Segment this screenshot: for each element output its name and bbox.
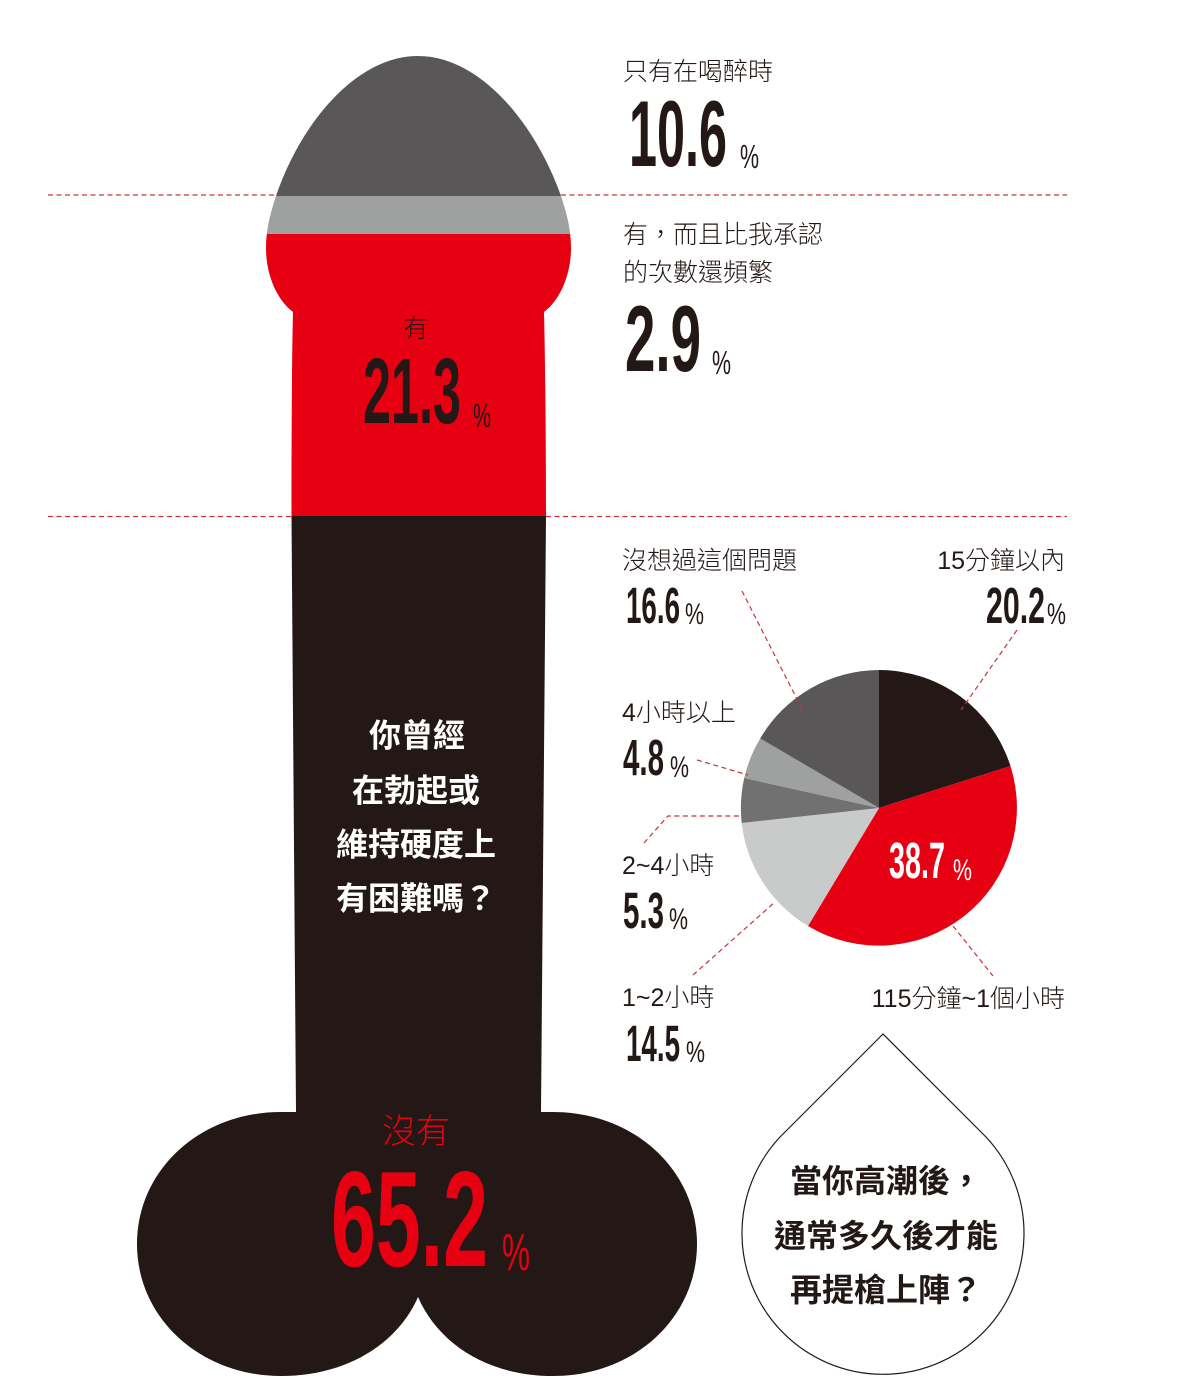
question text: 通常多久後才能 <box>774 1218 998 1254</box>
slice: 1 to 2 hours <box>742 808 879 926</box>
stat: more often than admitted 2.9% <box>623 221 823 391</box>
stat: only when drunk 10.6%: 只有在喝醉時 <box>623 58 773 86</box>
stat: within 15 minutes 20.2%: 15分鐘以內 <box>937 547 1065 575</box>
stat: 2 to 4 hours 5.3% <box>622 852 714 939</box>
stat: 1 to 2 hours 14.5%: 1~2小時 <box>622 984 714 1012</box>
label: 有 21.3%: 有 <box>403 315 429 343</box>
dashed divider upper <box>48 194 1067 196</box>
stat: more often than admitted 2.9%: 的次數還頻繁 <box>623 259 773 287</box>
stat: only when drunk 10.6%: 10.6 <box>629 81 727 186</box>
stat: 4 hours or more 4.8%: 4小時以上 <box>622 699 736 727</box>
segment: 10.6% dark grey tip <box>276 56 561 196</box>
slice: over 4 hours <box>744 738 879 808</box>
stat: 2 to 4 hours 5.3%: % <box>669 903 688 936</box>
stat: never thought about it 16.6%: % <box>685 598 704 631</box>
segment: 2.9% light grey band <box>266 196 570 234</box>
main question: 你曾經 <box>369 718 465 754</box>
label: 有 21.3%: % <box>473 397 491 434</box>
slice: 2 to 4 hours <box>741 778 879 823</box>
slice: 15 minutes to 1 hour <box>808 766 1017 946</box>
stat: 2 to 4 hours 5.3%: 2~4小時 <box>622 852 714 880</box>
stat: 2 to 4 hours 5.3%: 5.3 <box>623 882 664 939</box>
stat: more often than admitted 2.9%: 有，而且比我承認 <box>623 221 823 249</box>
stat: only when drunk 10.6% <box>623 58 773 186</box>
stat: 1 to 2 hours 14.5%: 14.5 <box>626 1015 680 1072</box>
label: 有 21.3% <box>363 315 491 443</box>
label: 沒有 65.2%: 沒有 <box>382 1113 450 1151</box>
stat: more often than admitted 2.9%: % <box>712 344 731 381</box>
label: 15 minutes to 1 hour: 115分鐘~1個小時 <box>872 985 1065 1013</box>
stat: 4 hours or more 4.8%: 4.8 <box>623 729 664 786</box>
label: 沒有 65.2%: 65.2 <box>331 1143 488 1295</box>
drop callout: second question <box>742 1034 1024 1374</box>
main question: 在勃起或 <box>352 772 480 808</box>
stat: 4 hours or more 4.8% <box>622 699 736 786</box>
segment: 65.2% black shaft <box>292 516 546 1112</box>
leader lines <box>644 591 1017 976</box>
drop outline <box>742 1034 1024 1374</box>
segment: right lobe <box>418 1112 697 1376</box>
main question: 有困難嗎？ <box>336 880 496 916</box>
stat: only when drunk 10.6%: % <box>740 138 759 175</box>
question text <box>774 1163 998 1308</box>
segment: left lobe <box>137 1112 418 1376</box>
stat: within 15 minutes 20.2%: 20.2 <box>986 577 1045 634</box>
figure: anatomical bar chart <box>137 50 697 1376</box>
stat: 15 minutes to 1 hour 38.7%: % <box>953 854 972 887</box>
label: 沒有 65.2%: % <box>502 1224 530 1282</box>
question text: 再提槍上陣？ <box>790 1272 982 1308</box>
stat: never thought about it 16.6%: 16.6 <box>626 577 680 634</box>
stat: within 15 minutes 20.2% <box>937 547 1066 634</box>
slice: never considered <box>760 670 879 808</box>
slice: 15 minutes or less <box>879 670 1010 808</box>
stat: 4 hours or more 4.8%: % <box>670 751 689 784</box>
stat: 1 to 2 hours 14.5% <box>622 984 714 1072</box>
pie chart <box>741 670 1017 946</box>
main question: 維持硬度上 <box>336 826 496 862</box>
segment: 21.3% red <box>266 234 571 516</box>
main question <box>336 718 496 916</box>
label: 有 21.3%: 21.3 <box>363 339 461 443</box>
stat: 1 to 2 hours 14.5%: % <box>686 1036 705 1069</box>
question text: 當你高潮後， <box>790 1163 982 1199</box>
dashed divider lower <box>48 516 1067 518</box>
stat: never thought about it 16.6%: 沒想過這個問題 <box>622 547 797 575</box>
stat: never thought about it 16.6% <box>622 547 797 634</box>
stat: 15 minutes to 1 hour 38.7%: 38.7 <box>889 832 945 889</box>
stat: within 15 minutes 20.2%: % <box>1047 598 1066 631</box>
stat: more often than admitted 2.9%: 2.9 <box>625 286 701 391</box>
label: 沒有 65.2% <box>331 1113 530 1295</box>
